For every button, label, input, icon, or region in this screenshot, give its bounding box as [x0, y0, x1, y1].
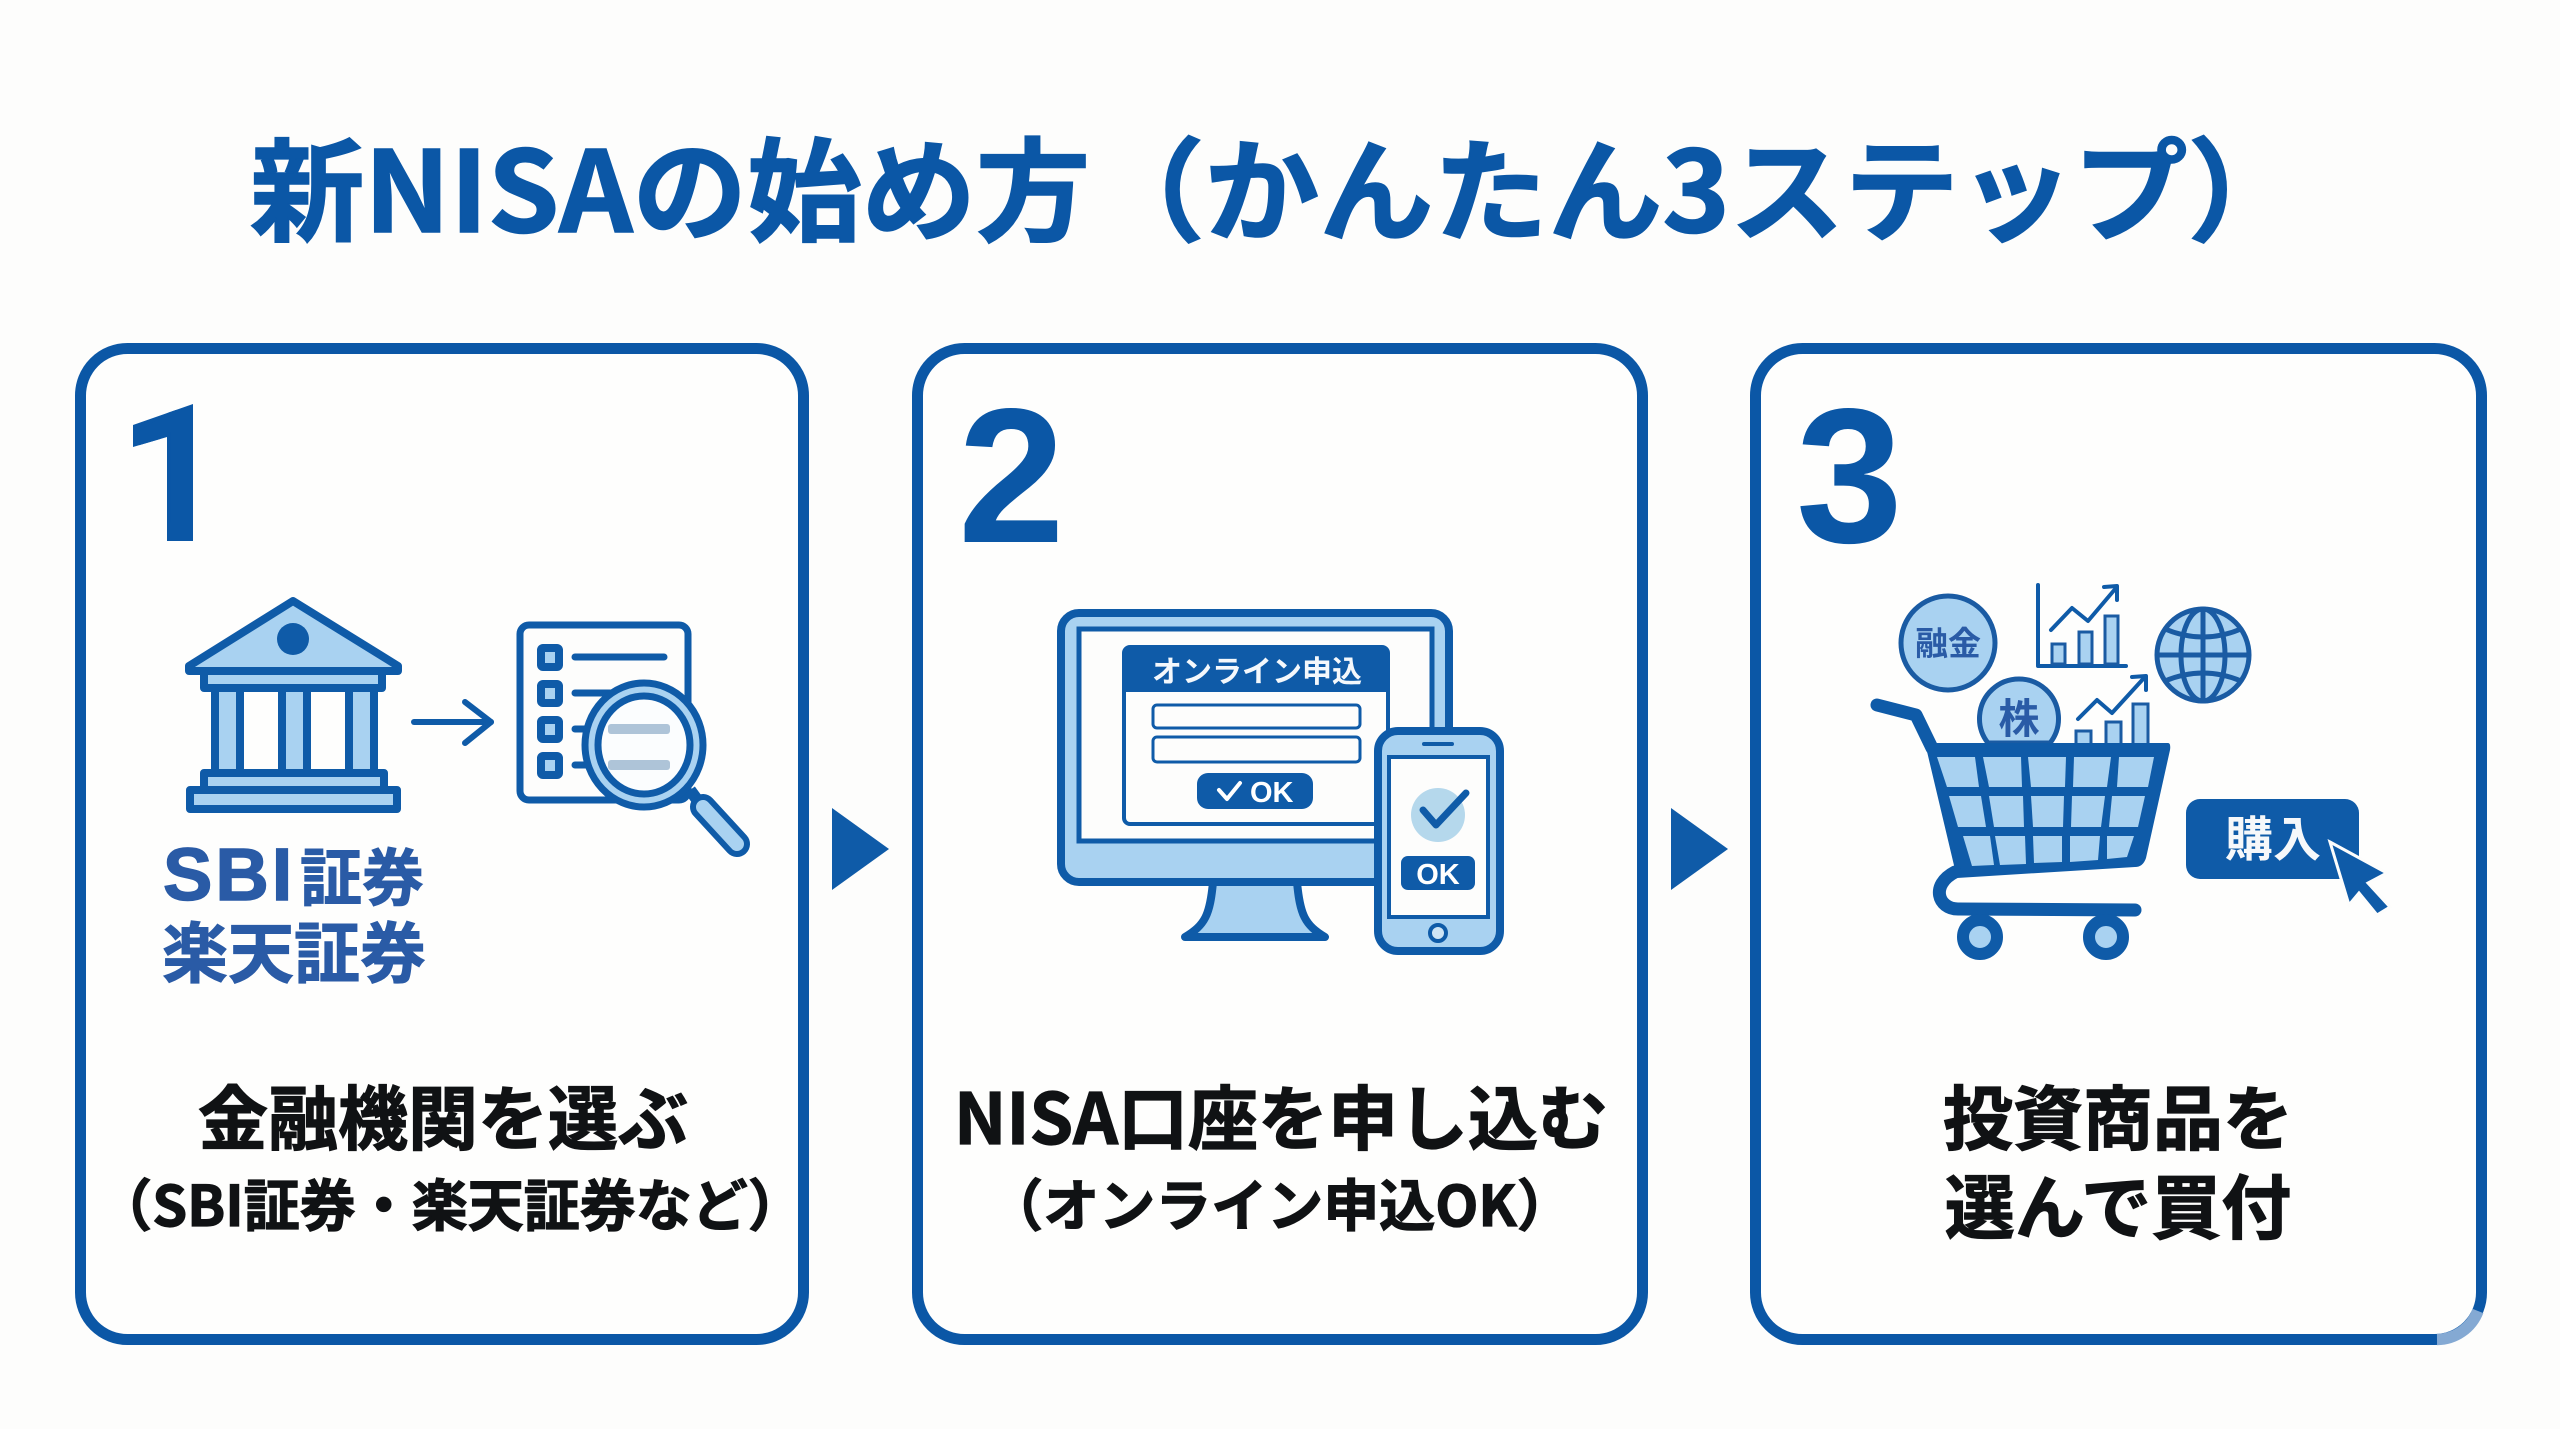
- icon: bank: [189, 601, 398, 809]
- panel: step 1: [80, 348, 804, 1340]
- title: 新NISAの始め方（かんたん3ステップ）: [250, 103, 2302, 265]
- icon: smartphone: [1378, 731, 1500, 951]
- icon: globe: [2157, 609, 2249, 701]
- securities names: [162, 828, 426, 997]
- securities names: 証券: [300, 828, 424, 918]
- step 3 label: [1943, 1064, 2293, 1254]
- step number 1: 1: [126, 368, 233, 583]
- panel: step 2: [918, 348, 1642, 1340]
- securities names: 楽天証券: [162, 901, 426, 997]
- step 3 label: 投資商品を: [1943, 1064, 2293, 1165]
- icon: small chart: [2076, 676, 2148, 745]
- step 1 label: 金融機関を選ぶ: [198, 1064, 688, 1165]
- icon: chart: [2038, 585, 2126, 666]
- icon: stock coin: 株: [1998, 685, 2040, 745]
- button: purchase: 購入: [2225, 800, 2321, 870]
- step 1 label: （SBI証券・楽天証券など）: [96, 1162, 804, 1243]
- panel 1 frame: [80, 348, 804, 1340]
- button: purchase: [2186, 799, 2359, 879]
- step 3 label: 選んで買付: [1945, 1153, 2291, 1254]
- arrow: bank to checklist: [414, 702, 491, 743]
- icon: monitor with online form: OK: [1250, 777, 1294, 809]
- panel: step 3: [1756, 348, 2482, 1340]
- icon: smartphone: OK: [1416, 859, 1460, 891]
- icon: checklist with magnifier: [520, 625, 737, 844]
- step 2 label: NISA口座を申し込む: [954, 1064, 1608, 1165]
- icon: cursor: [2330, 842, 2390, 915]
- securities names: SBI: [163, 833, 295, 916]
- arrow: step 2 to 3: [1671, 808, 1728, 890]
- panel 2 frame: [918, 348, 1642, 1340]
- icon: coin yuushi: [1901, 596, 1995, 690]
- step number 1: [133, 404, 193, 541]
- step 1 label: [96, 1064, 804, 1243]
- step 2 label: [954, 1064, 1608, 1243]
- arrow: step 1 to 2: [832, 808, 889, 890]
- step 2 label: （オンライン申込OK）: [987, 1162, 1573, 1243]
- icon: stock coin: [1980, 679, 2058, 745]
- step number 2: 2: [958, 368, 1065, 583]
- icon: shopping cart: [1877, 705, 2170, 954]
- icon: monitor with online form: [1061, 613, 1449, 937]
- panel 3 frame: [1756, 348, 2482, 1340]
- icon: coin yuushi: 融金: [1915, 617, 1981, 665]
- icon: monitor with online form: オンライン申込: [1152, 647, 1362, 691]
- step number 3: 3: [1796, 368, 1903, 583]
- faded corner: [2437, 1311, 2478, 1340]
